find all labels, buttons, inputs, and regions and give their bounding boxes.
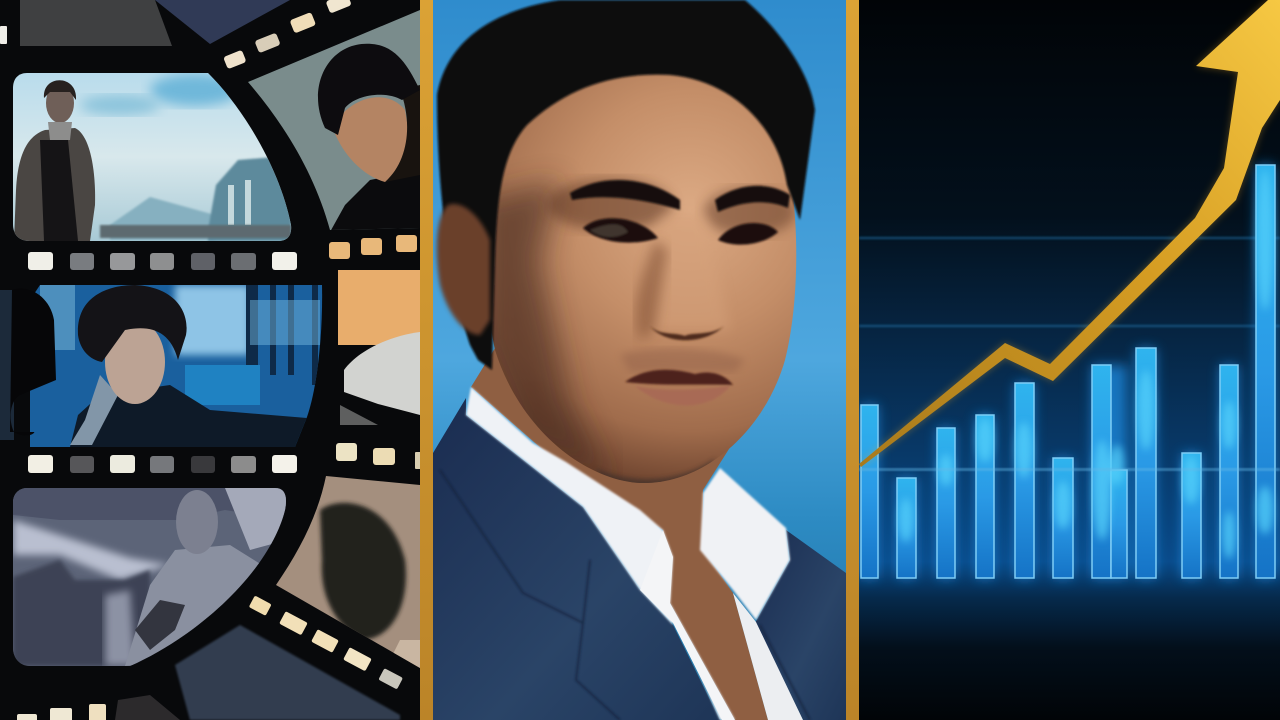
shirt collar left: [466, 387, 735, 720]
reel spoke blob: [10, 288, 56, 436]
frame: orange panel and car: [338, 270, 420, 425]
panel: portrait: [433, 0, 846, 720]
left dark band: [0, 290, 14, 440]
horizontal glow line: [859, 468, 1280, 471]
shirt placket right: [733, 593, 803, 720]
eyebrows: [570, 180, 790, 212]
top film frames: [20, 0, 290, 720]
sprocket row 1: [28, 252, 297, 270]
panel divider: left gold bar: [420, 0, 433, 720]
panel: film reel: [0, 0, 421, 720]
ear: [437, 204, 490, 335]
growth arrow: [859, 0, 1280, 467]
strip holes outer: [0, 0, 421, 720]
suit right: [755, 530, 846, 720]
hair: [437, 0, 815, 370]
eyes: [583, 218, 778, 245]
film frame 3: [13, 488, 289, 668]
face: [479, 66, 796, 490]
bar chart: [861, 165, 1275, 578]
grid lines: [859, 238, 1280, 326]
film frame 2: [30, 285, 325, 450]
film frame 1: [13, 73, 293, 241]
nostrils and lips: [625, 326, 733, 406]
neck: [471, 340, 768, 720]
frame: actor top right: [240, 0, 420, 232]
frame: dark hair bottom right: [276, 476, 420, 668]
suit left: [433, 398, 720, 720]
frame: navy lower: [175, 625, 400, 720]
shirt collar right: [700, 468, 790, 620]
shirt placket left: [640, 530, 735, 720]
panel divider: right gold bar: [846, 0, 859, 720]
sprocket row 2: [28, 455, 297, 473]
lapel shadow lines: [440, 470, 810, 720]
panel: growth chart: [859, 0, 1280, 720]
